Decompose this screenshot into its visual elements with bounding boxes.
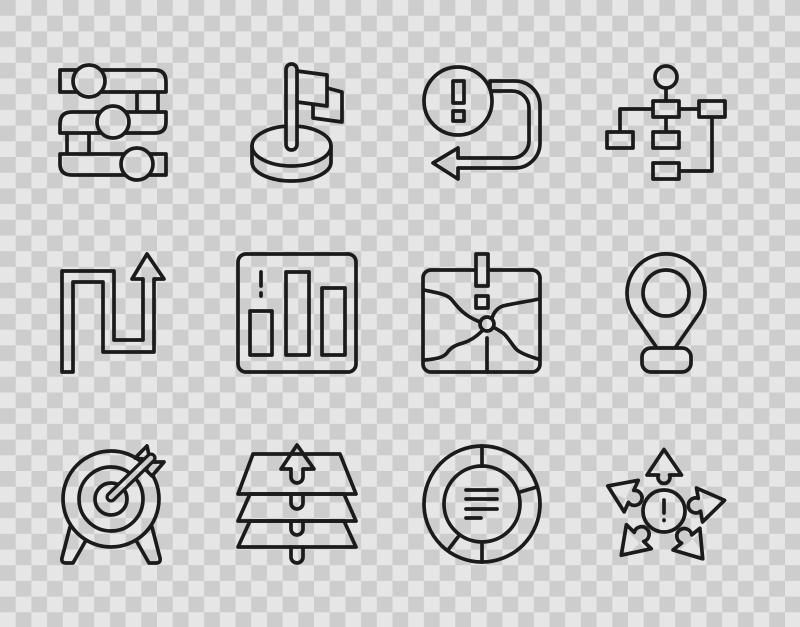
icon: map pin bbox=[627, 254, 705, 372]
icon: flowchart bbox=[607, 66, 725, 179]
icon: road map with alert bbox=[423, 254, 540, 372]
icon: flag on podium bbox=[252, 64, 342, 181]
icon: alert with return arrow bbox=[424, 67, 540, 179]
icon: layers with arrow bbox=[238, 445, 356, 563]
icon: bar chart with alert bbox=[238, 254, 356, 372]
icon: donut chart with text lines bbox=[424, 446, 540, 562]
icon: winding route arrow bbox=[62, 254, 164, 372]
icon: alert with arrows radiating bbox=[601, 450, 728, 570]
icon: target with arrow bbox=[62, 446, 164, 563]
icon: timeline sliders bbox=[60, 65, 166, 180]
